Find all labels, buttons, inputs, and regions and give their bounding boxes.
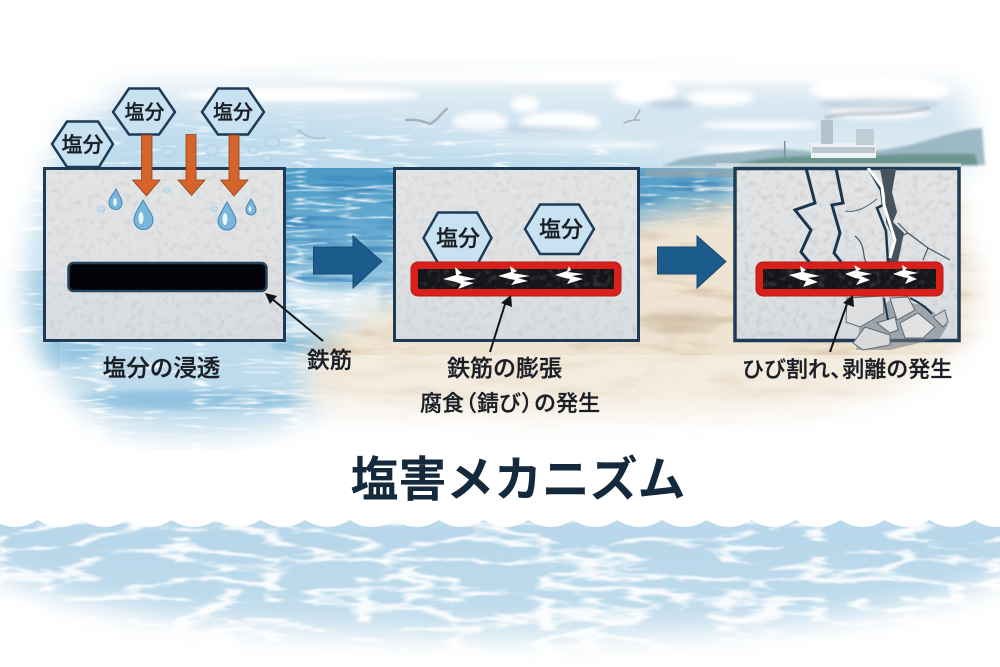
lightning marks [443,266,584,289]
hexagon: salt right [202,88,264,134]
hexagon: salt right [525,204,594,254]
seagulls [298,109,640,139]
water drops and bubbles [97,137,280,230]
arrows: salt entering [132,134,248,196]
arrow: step 2 to 3 [658,236,726,288]
rebar: intact [68,263,266,291]
arrow: to rebar [830,295,854,352]
hexagon: salt left [52,122,113,167]
hexagon: salt right: 塩分 [539,217,583,242]
sand beach [294,182,988,425]
sky with clouds [96,72,981,178]
rubble [846,296,948,350]
hexagon: salt right: 塩分 [213,101,253,124]
label: rebar: 鉄筋 [307,348,352,373]
hexagon: salt left: 塩分 [436,226,480,251]
wave edge [0,500,1000,527]
hexagon: salt centre: 塩分 [124,101,164,124]
hexagon: salt left: 塩分 [62,134,104,157]
panel 2: rebar expansion [394,168,638,416]
sea [0,100,760,450]
label: cracking and spalling: ひび割れ、剥離の発生 [742,357,952,382]
arrow: step 1 to 2 [314,236,382,288]
label: corrosion: 腐食（錆び）の発生 [420,391,600,416]
title: 塩害メカニズム [350,454,686,507]
hexagon: salt left [424,212,492,263]
cracks [795,168,950,263]
distant shore hills and factory [645,108,985,177]
concrete block 1 [44,168,284,340]
rebar: rusted with red band [411,262,621,296]
label: salt penetration: 塩分の浸透 [103,355,220,381]
concrete block 3 [735,168,959,340]
panel 1: salt penetration [44,88,284,381]
concrete block 2 [394,168,638,340]
arrow: to rebar [490,295,512,352]
panel 3: cracking and spalling [735,168,959,382]
lower water band [0,520,1000,651]
label: rebar expansion: 鉄筋の膨張 [447,355,562,381]
rebar: rusted with red band [756,262,943,296]
hexagon: salt centre [113,88,175,134]
arrow: to rebar [265,293,323,341]
rebar callout [265,293,352,373]
lightning marks [789,265,918,287]
